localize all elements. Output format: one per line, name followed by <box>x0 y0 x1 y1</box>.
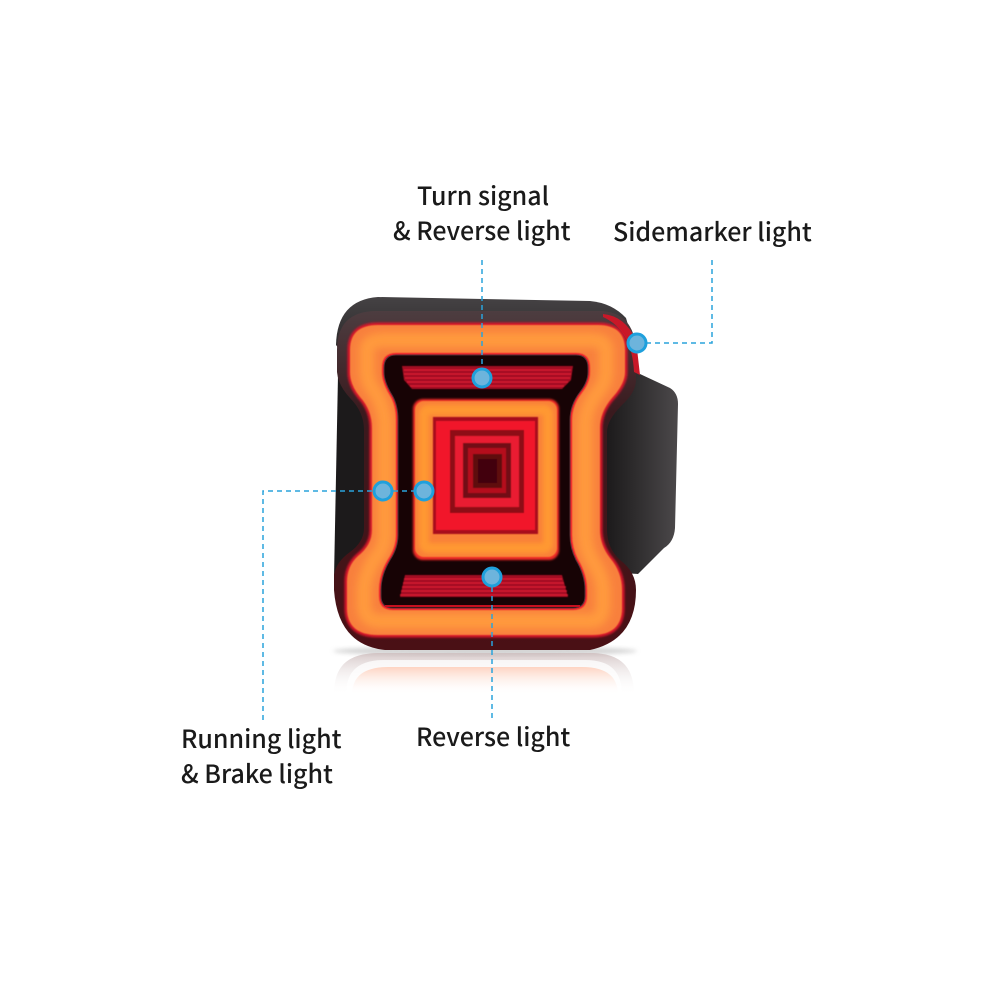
label: reverse light: Reverse light <box>416 718 570 754</box>
callout dot: running light <box>374 482 392 500</box>
callout dot: brake light <box>415 482 433 500</box>
ring inner glow <box>381 355 588 608</box>
tail light <box>334 297 678 650</box>
label: running light and brake light: Running light <box>181 720 342 756</box>
callout lines <box>263 260 712 722</box>
label: sidemarker light: Sidemarker light <box>613 213 812 249</box>
tail light reflection <box>333 646 637 695</box>
label: turn signal and reverse light <box>393 177 571 248</box>
outer orange ring <box>347 325 625 635</box>
label: turn signal and reverse light: Turn signal <box>417 177 549 213</box>
top cap <box>336 297 634 350</box>
red frame line in cavity bottom <box>385 605 580 607</box>
inner square highlight <box>424 410 548 548</box>
lens outline <box>334 311 636 650</box>
label: turn signal and reverse light: & Reverse light <box>393 212 571 248</box>
concentric squares <box>433 417 538 534</box>
inner orange square glow <box>413 399 559 560</box>
left dark housing <box>334 375 375 578</box>
ring inner cavity <box>381 355 588 608</box>
upper red strip <box>402 366 573 389</box>
ring red glow <box>347 325 625 635</box>
label: running light and brake light: & Brake light <box>181 755 333 791</box>
callout dot: sidemarker <box>628 334 646 352</box>
callout dot: turn signal <box>473 369 491 387</box>
side marker red sliver <box>603 314 640 375</box>
side mount housing <box>595 370 678 574</box>
ring core highlight <box>364 340 606 621</box>
lower red strip <box>400 575 568 597</box>
inner orange square <box>415 401 557 557</box>
callout dot: reverse light <box>483 568 501 586</box>
label: running light and brake light <box>181 720 342 791</box>
